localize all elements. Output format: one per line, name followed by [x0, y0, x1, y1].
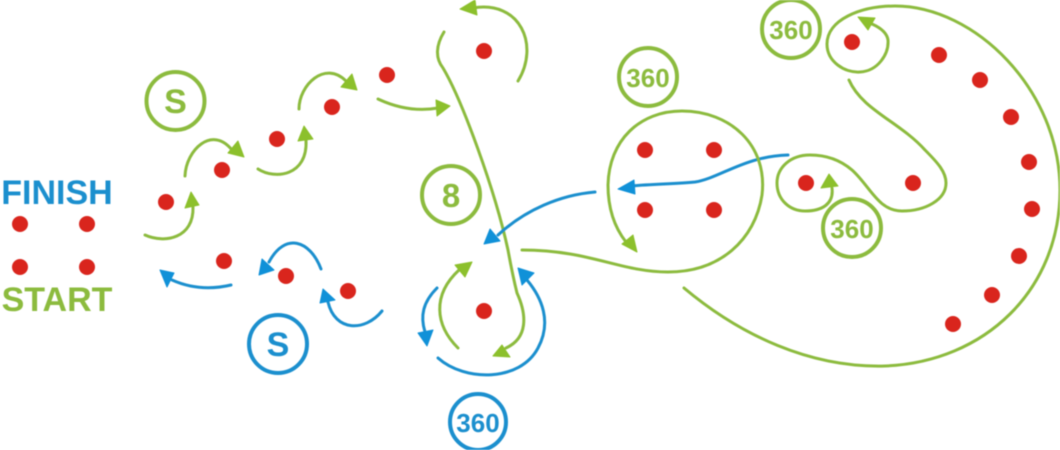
blue arrow across box: [618, 155, 788, 194]
badge: S green: [146, 72, 204, 130]
badge: 360 box: 360: [626, 63, 670, 93]
green arrow around top cone: [460, 0, 527, 81]
green figure-of-eight line: [437, 32, 524, 357]
badge: 360 lower: [823, 199, 881, 257]
red cones: [12, 34, 1040, 332]
green arrow 2: [185, 140, 244, 176]
badge: 360 box: [619, 48, 677, 106]
badge: S blue: S: [267, 326, 289, 364]
green circle path around box: [522, 111, 763, 272]
heading: finish: FINISH: [1, 174, 113, 212]
heading: start: START: [2, 281, 113, 319]
blue arrow 3 return: [320, 289, 382, 326]
badge: 360 lower: 360: [830, 214, 874, 244]
blue arrow 1 return: [160, 270, 231, 288]
blue arc below bottom cone: [438, 268, 545, 375]
badge: 360 blue: 360: [456, 408, 500, 438]
badge: 360 blue: [450, 394, 506, 450]
badge: 360 top: 360: [769, 15, 813, 45]
green arrow 4: [299, 73, 357, 109]
badge: 8: 8: [442, 177, 460, 214]
badge: S green: S: [164, 83, 187, 121]
green arrow 1: [145, 192, 199, 239]
blue arrow to bottom cone: [484, 192, 595, 244]
green arrow 3: [258, 126, 313, 174]
blue arrow left of bottom cone: [418, 288, 437, 346]
green arrow around bottom cone: [440, 262, 472, 348]
badge: 360 top: [762, 0, 820, 58]
green arrow 5: [378, 99, 450, 116]
badge: S blue: [249, 315, 307, 373]
badge: 8: [422, 166, 480, 224]
blue arrow 2 return: [259, 243, 321, 275]
green long outer path: [684, 6, 1060, 366]
green S-curve path: [777, 80, 946, 211]
